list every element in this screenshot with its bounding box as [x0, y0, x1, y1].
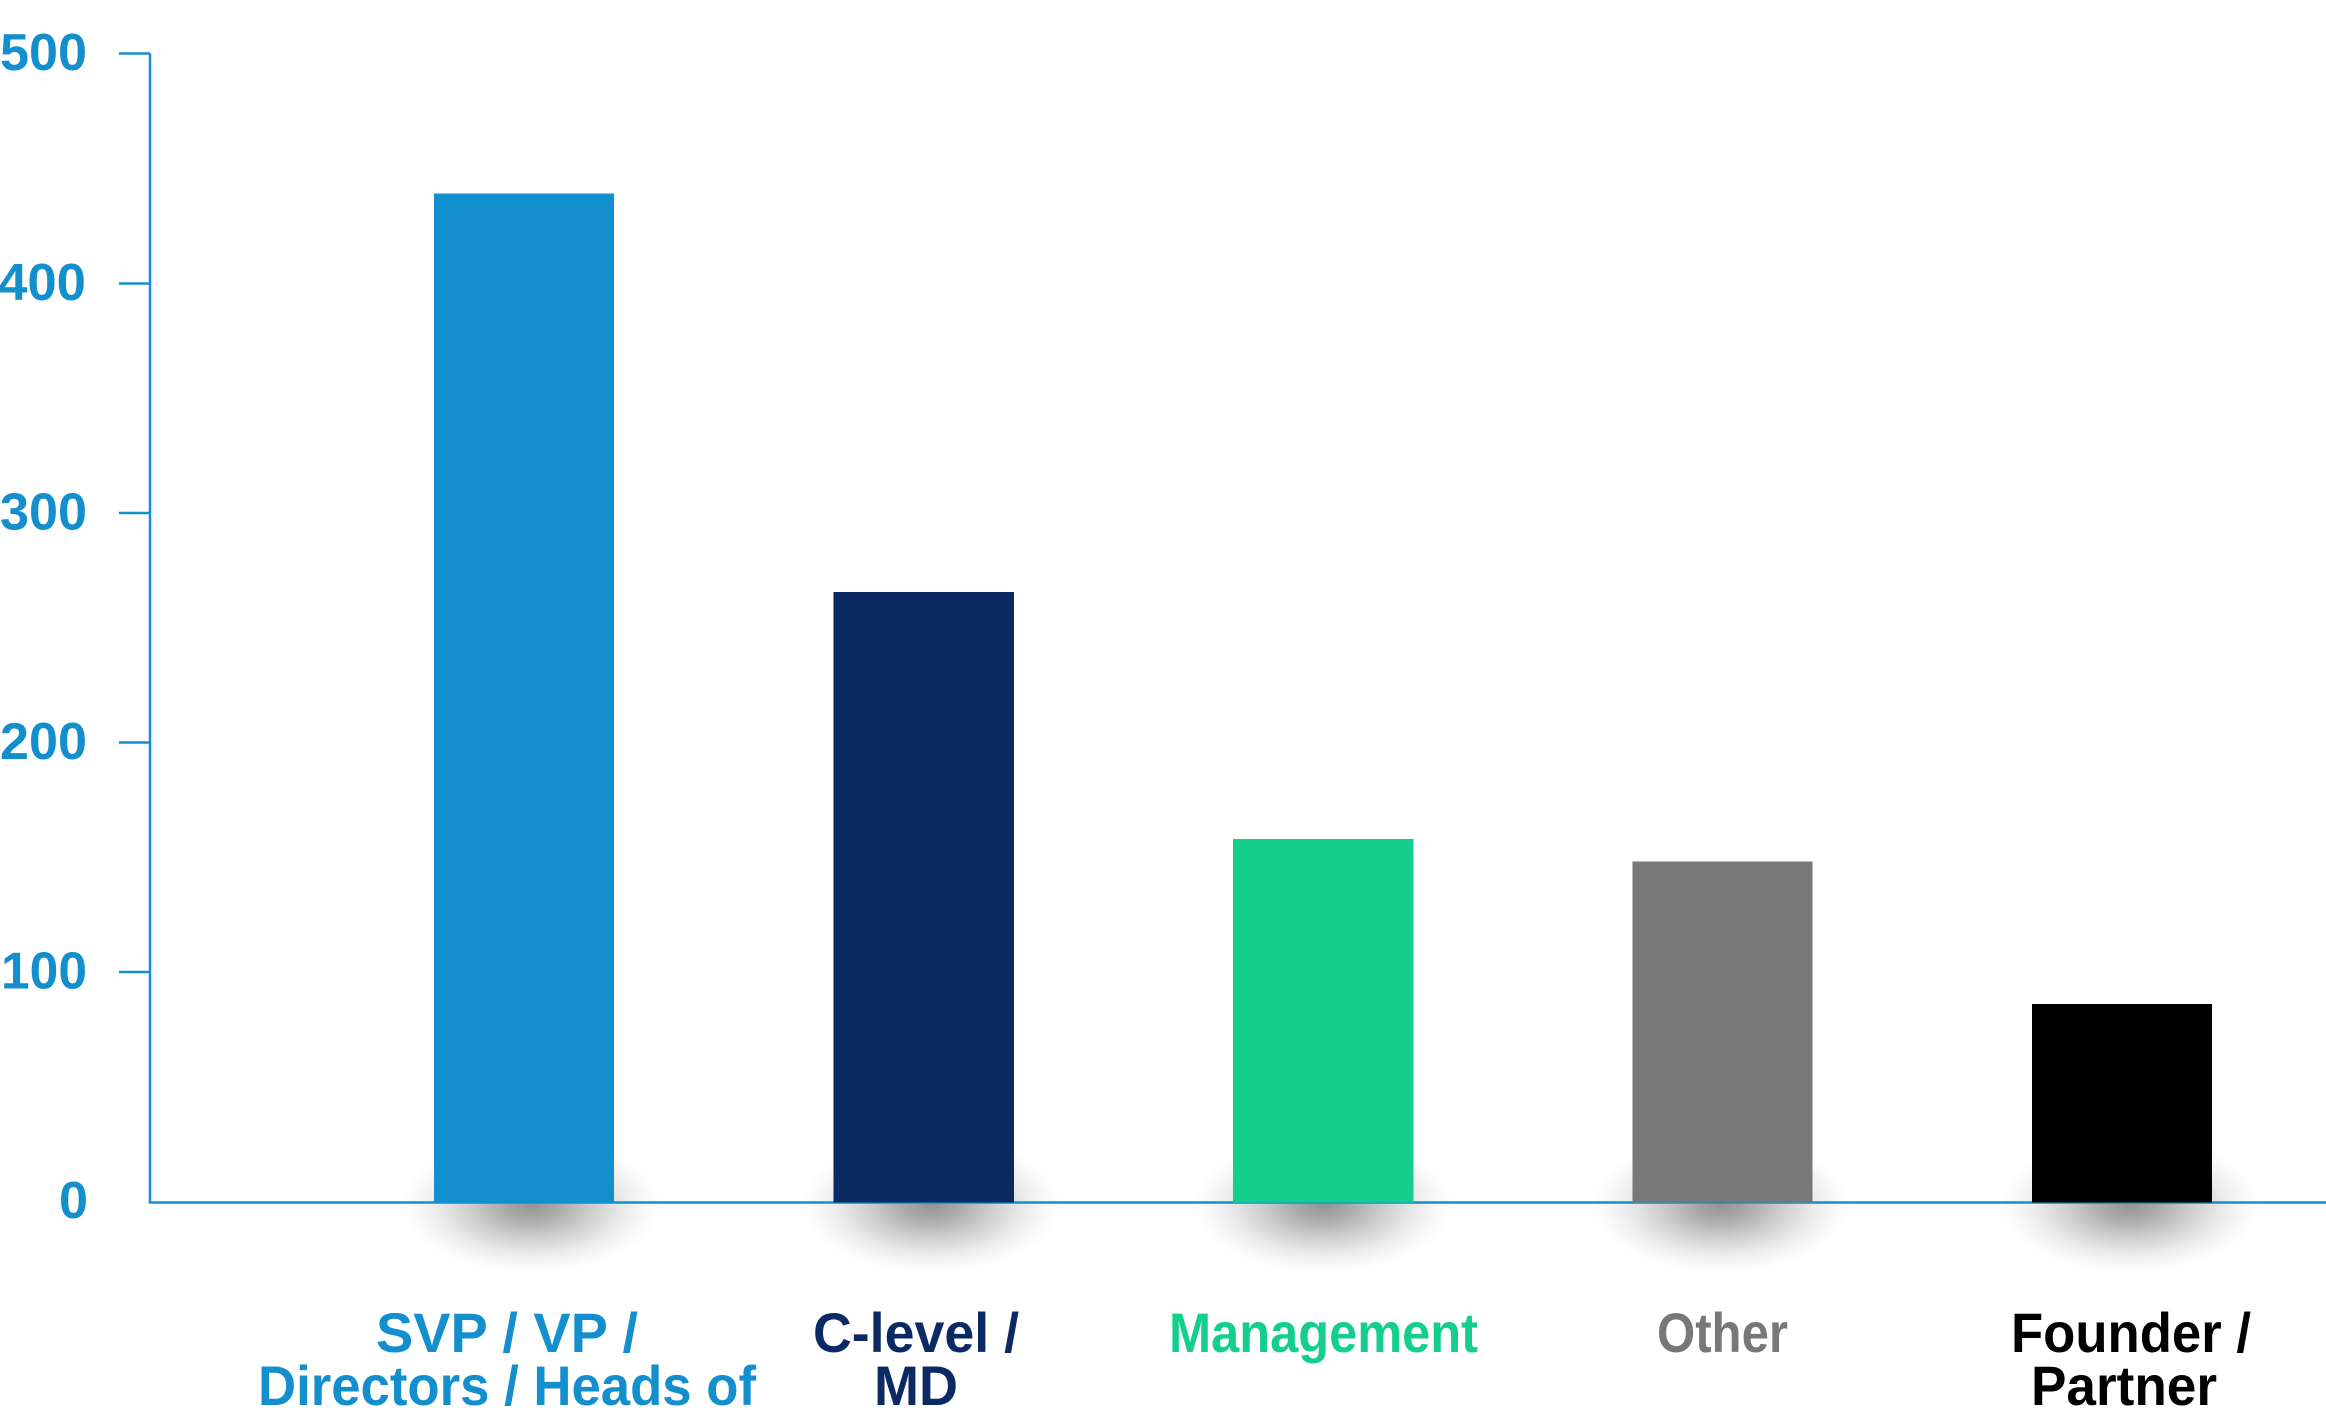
category label: Founder / Partner: Founder / [2011, 1301, 2251, 1364]
category label: SVP / VP / Directors / Heads of [258, 1301, 756, 1410]
category label: Founder / Partner [2011, 1301, 2251, 1410]
y-axis labels: 400 [0, 254, 86, 312]
y-axis labels: 0 [59, 1172, 88, 1230]
y-axis labels: 500 [0, 24, 87, 82]
bar: Management [1233, 839, 1414, 1202]
y-axis labels: 200 [0, 713, 87, 771]
bar: Founder / Partner [2032, 1004, 2212, 1202]
category label: C-level / MD [813, 1301, 1019, 1410]
bar shadows [398, 1135, 2263, 1275]
y-axis labels: 300 [0, 484, 87, 542]
category label: SVP / VP / Directors / Heads of: SVP / VP / [376, 1301, 638, 1364]
axes and tick marks [119, 54, 2326, 1202]
category label: C-level / MD: C-level / [813, 1301, 1019, 1364]
bar: C-level / MD [834, 592, 1014, 1202]
y-axis labels [0, 24, 88, 1230]
category label: Other: Other [1657, 1301, 1788, 1364]
bar: Other [1632, 862, 1812, 1202]
bar: SVP / VP / Directors / Heads of [434, 194, 614, 1202]
y-axis labels: 100 [1, 942, 87, 1000]
category label: Management: Management [1169, 1301, 1478, 1364]
